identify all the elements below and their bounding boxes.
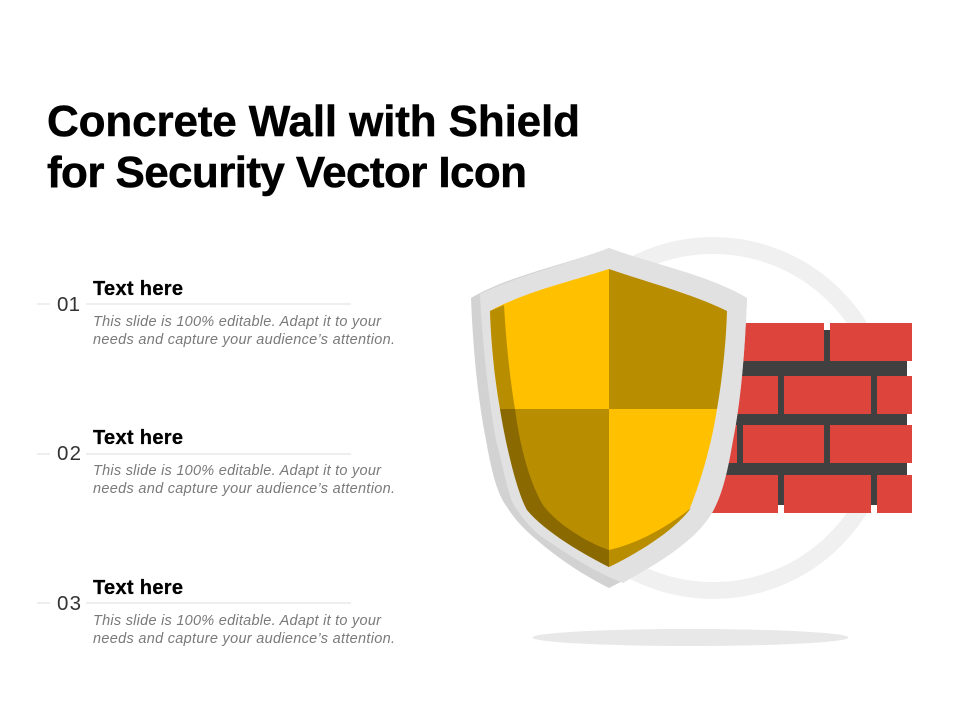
title — [47, 97, 580, 197]
list item 01: needs and capture your audience’s attention. — [93, 332, 395, 348]
list item 02: needs and capture your audience’s attention. — [93, 481, 395, 497]
list item 03: Text here — [93, 577, 183, 599]
icon: brick wall — [650, 323, 912, 513]
list item 01: Text here — [93, 278, 183, 300]
bottom-left shade — [500, 409, 609, 567]
shield top-left quadrant — [490, 269, 609, 409]
list item 02: Text here — [93, 427, 183, 449]
title: Concrete Wall with Shield — [47, 97, 580, 146]
top-left shade — [490, 305, 515, 409]
icon: shield — [471, 248, 747, 588]
list item 02: 02 — [57, 442, 81, 465]
list item 02 — [37, 427, 395, 497]
shield bottom-right quadrant — [609, 409, 717, 567]
bottom-right shade — [609, 508, 691, 567]
ground shadow — [532, 629, 848, 646]
shield outer rim shade — [471, 248, 747, 588]
list item 03: This slide is 100% editable. Adapt it to your — [93, 613, 382, 629]
shield top-right quadrant — [609, 269, 727, 409]
shield bottom-left quadrant — [500, 409, 609, 567]
background ring — [540, 246, 886, 590]
title: for Security Vector Icon — [47, 148, 527, 197]
list item 03: needs and capture your audience’s attention. — [93, 631, 395, 647]
list item 01 — [37, 278, 395, 348]
list item 01: 01 — [57, 293, 80, 316]
shield rim — [480, 248, 747, 583]
list item 03: 03 — [57, 592, 81, 615]
list item 03 — [37, 577, 395, 647]
list item 02: This slide is 100% editable. Adapt it to your — [93, 463, 382, 479]
list item 01: This slide is 100% editable. Adapt it to your — [93, 314, 382, 330]
